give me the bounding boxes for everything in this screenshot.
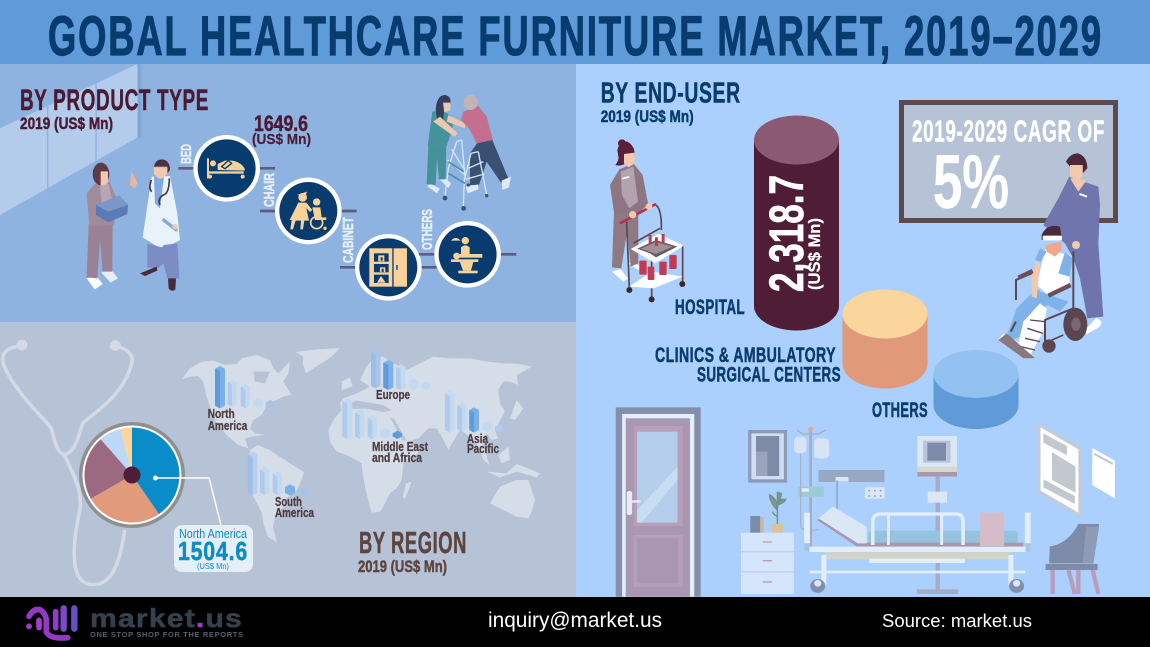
cylinder: others [934, 350, 1018, 429]
icon: cabinet [355, 234, 422, 301]
cylinder: hospital [754, 116, 839, 330]
wall picture [748, 430, 787, 483]
labels: regions: Europe [376, 387, 410, 402]
bars: asia pacific [445, 391, 503, 433]
callout line [154, 476, 221, 525]
bars: north america [215, 366, 275, 408]
cylinder: hospital: (US$ Mn) [805, 218, 824, 290]
label: bed: BED [178, 144, 195, 164]
door [616, 407, 701, 597]
labels: end users: SURGICAL CENTERS [697, 364, 841, 387]
illustration: nurse and doctor [87, 159, 180, 291]
monitor on stand [917, 436, 958, 594]
callout: north america value: North America [179, 526, 248, 541]
connector: product line pieces [178, 168, 516, 267]
labels: regions: Asia [467, 431, 489, 446]
callout: north america value: (US$ Mn) [197, 562, 229, 571]
illustration: hospital room [616, 407, 1115, 597]
cylinder: clinics [842, 290, 928, 388]
world map [182, 348, 540, 542]
armchair [1046, 524, 1099, 594]
footer: source: Source: market.us [882, 610, 1032, 631]
logo: market.us: ONE STOP SHOP FOR THE REPORTS [90, 630, 243, 639]
illustration: nurse with trolley [610, 139, 685, 302]
heading: by region [358, 525, 467, 576]
heading: by region: BY REGION [359, 525, 467, 560]
chart: product type icons [178, 135, 516, 301]
wall gas panel [818, 470, 885, 508]
label: others: OTHERS [419, 209, 436, 250]
labels: regions: South [275, 494, 302, 509]
labels: end users: OTHERS [872, 399, 928, 422]
bars: europe [371, 348, 431, 390]
bars: south america [248, 452, 307, 496]
illustration: nurse helping patient with walker [427, 95, 511, 211]
footer: contact email: inquiry@market.us [488, 609, 662, 632]
callout: north america value: 1504.6 [178, 536, 248, 566]
labels: regions: America [275, 505, 315, 520]
chart: regional bars [215, 348, 503, 496]
panel: by product type [0, 64, 576, 322]
header band [0, 0, 1150, 64]
heading: by end-user [601, 78, 741, 126]
heading: by product type: 2019 (US$ Mn) [20, 114, 113, 133]
heading: by product type: BY PRODUCT TYPE [20, 84, 209, 117]
labels: end users: CLINICS & AMBULATORY [655, 344, 836, 367]
hospital bed [804, 507, 1031, 593]
labels: regions: Middle East [372, 439, 429, 454]
callout: cagr board: 5% [933, 140, 1009, 225]
labels: end users: HOSPITAL [675, 296, 745, 319]
labels: regions: North [208, 406, 235, 421]
label: cabinet: CABINET [340, 217, 357, 263]
callout: north america value [174, 525, 253, 572]
heading: by region: 2019 (US$ Mn) [358, 557, 447, 576]
labels: regions: Pacific [467, 441, 499, 456]
bars: middle east and africa [342, 398, 402, 439]
panel: by end-user [576, 64, 1150, 597]
nightstand with plant [741, 492, 794, 594]
callout: cagr board [902, 102, 1116, 225]
labels: regions: America [208, 418, 248, 433]
illustration: stethoscope [3, 340, 132, 585]
chart: regional pie [79, 422, 185, 528]
cylinder: hospital: 2,318.7 [761, 175, 814, 292]
logo: market.us: market .us [90, 603, 243, 633]
illustration: nurse pushing wheelchair [998, 153, 1103, 358]
footer bar [0, 597, 1150, 647]
wall posters [1038, 423, 1115, 517]
callout: bed value: (US$ Mn) [252, 131, 311, 148]
heading: by end-user: 2019 (US$ Mn) [601, 107, 694, 126]
icon: bed [193, 135, 260, 202]
icon: wheelchair [275, 178, 342, 244]
labels: regions [208, 387, 499, 520]
labels: regions: and Africa [372, 450, 423, 465]
panel: by region [0, 322, 576, 597]
callout: bed value: 1649.6 [254, 111, 308, 136]
heading: by end-user: BY END-USER [601, 78, 741, 110]
labels: end users [655, 296, 928, 422]
heading: by product type [20, 84, 209, 133]
label: chair: CHAIR [261, 173, 278, 207]
logo: market.us [26, 603, 243, 639]
iv stand [794, 427, 829, 548]
icon: operating table [434, 221, 501, 288]
callout: bed value [252, 111, 311, 148]
